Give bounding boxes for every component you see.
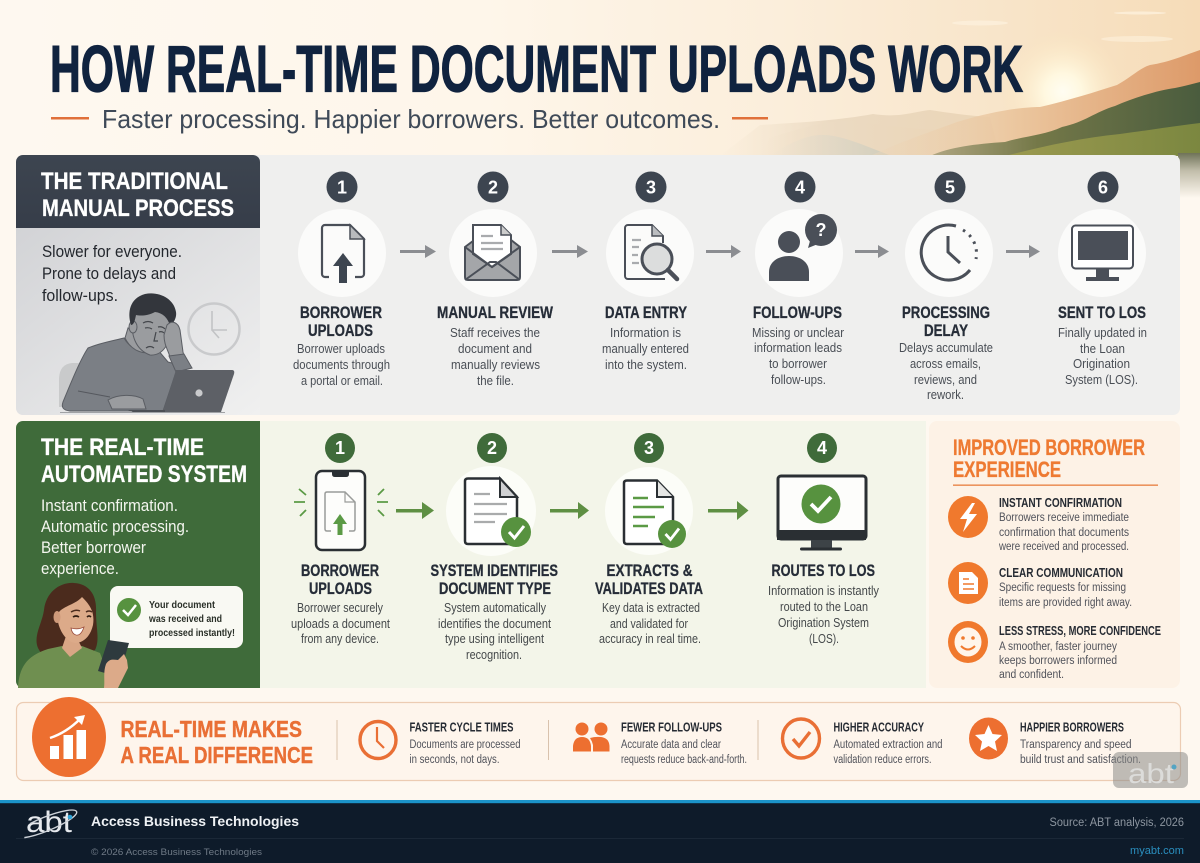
heading: real-time makes a real difference: REAL-TIME MAKES (120, 716, 302, 742)
step 3 text: DATA ENTRY (605, 304, 687, 322)
step 2 text: type using intelligent (445, 632, 544, 646)
callout: confirmation message: processed instantly! (149, 627, 235, 639)
panel: improved borrower experience: EXPERIENCE (953, 457, 1061, 482)
step 1 text: Borrower uploads (297, 342, 385, 356)
step 4 text: routed to the Loan (780, 600, 868, 614)
step 3 text (595, 562, 703, 646)
step 2 text: manually reviews (451, 358, 540, 372)
stat: faster cycle times: in seconds, not days. (410, 754, 500, 766)
step 3 text: into the system. (605, 358, 687, 372)
panel: real-time makes a real difference (16, 697, 1180, 780)
step 5 text (899, 304, 993, 402)
benefit: less stress, more confidence: A smoother, faster journey (999, 641, 1117, 653)
step 1 text: documents through (293, 358, 390, 372)
benefit: clear communication: CLEAR COMMUNICATION (999, 565, 1123, 580)
step 2 text: System automatically (444, 601, 547, 615)
step 3: extracts and validates data: 3 (644, 438, 654, 458)
stat: fewer follow-ups (573, 720, 747, 766)
step 2 text: the file. (477, 374, 514, 388)
step 3 text: EXTRACTS & (606, 562, 693, 580)
stat: faster cycle times (360, 720, 520, 766)
illustration: stressed man at laptop (59, 293, 240, 413)
stat: higher accuracy: HIGHER ACCURACY (834, 720, 924, 734)
step 3: extracts and validates data (595, 433, 703, 646)
benefit: less stress, more confidence: and confident. (999, 669, 1064, 681)
stat: higher accuracy (782, 719, 942, 766)
step 1 text: uploads a document (291, 617, 390, 631)
step 4 text: follow-ups. (771, 373, 826, 387)
benefit: instant confirmation: INSTANT CONFIRMATION (999, 495, 1122, 510)
step 1 text: UPLOADS (309, 580, 372, 598)
callout: confirmation message (110, 586, 243, 648)
benefit: instant confirmation: Borrowers receive immediate (999, 512, 1129, 524)
step 2 text: DOCUMENT TYPE (439, 580, 551, 598)
arrow 3 to 4 (708, 501, 748, 520)
panel: improved borrower experience (929, 421, 1180, 688)
panel: left automated summary: Better borrower (41, 538, 146, 557)
step 4: follow-ups: ? (816, 220, 826, 240)
step 1 text (293, 304, 390, 388)
step 1: borrower uploads (291, 433, 390, 646)
step 1 text: BORROWER (300, 304, 382, 322)
step 6: sent to LOS: 6 (1098, 178, 1108, 198)
step 2 text (430, 562, 558, 662)
step 3 text: accuracy in real time. (599, 632, 701, 646)
step 3: data entry (602, 172, 694, 372)
step 5 text: PROCESSING (902, 304, 990, 322)
step 2 text: SYSTEM IDENTIFIES (430, 562, 558, 580)
header landscape (0, 0, 1200, 198)
panel: left traditional summary (16, 155, 260, 415)
arrow 2 to 3 (550, 502, 589, 519)
step 5 text: rework. (927, 388, 964, 402)
step 3 text: Key data is extracted (602, 601, 700, 615)
benefit: clear communication: items are provided right away. (999, 597, 1132, 609)
step 1 text: Borrower securely (297, 601, 384, 615)
panel: left traditional summary: MANUAL PROCESS (42, 195, 234, 222)
step 2 text: recognition. (466, 648, 522, 662)
step 2: system identifies document type (430, 433, 558, 662)
step 4: follow-ups: 4 (795, 178, 805, 198)
arrow 3 to 4 (706, 245, 741, 258)
stat: faster cycle times: FASTER CYCLE TIMES (410, 720, 514, 734)
step 2: system identifies document type: 2 (487, 438, 497, 458)
step 5 text: reviews, and (914, 373, 977, 387)
step 4: routes to LOS (768, 433, 880, 646)
step 4 text: Information is instantly (768, 584, 880, 598)
step 3 text: manually entered (602, 342, 689, 356)
step 6 text: Finally updated in (1058, 326, 1147, 340)
stat: happier borrowers: build trust and satisfaction. (1020, 754, 1141, 766)
stat: higher accuracy: validation reduce errors. (834, 754, 932, 766)
step 4 text (768, 562, 880, 646)
step 5 text: Delays accumulate (899, 341, 993, 355)
step 4 text: to borrower (769, 357, 827, 371)
footer source: Source: ABT analysis, 2026 (1050, 817, 1184, 829)
stat: happier borrowers: Transparency and speed (1020, 739, 1132, 751)
panel: left traditional summary: Prone to delays and (42, 264, 176, 283)
step 2 text (437, 304, 553, 388)
logo: abt: abt (26, 806, 73, 839)
step 2: manual review (437, 172, 553, 388)
step 6 text: Origination (1073, 357, 1130, 371)
icon: growth chart (32, 697, 106, 777)
illustration: smiling woman with phone (18, 583, 129, 688)
footer (0, 800, 1200, 863)
step 1 text: UPLOADS (308, 322, 373, 340)
step 2 text: MANUAL REVIEW (437, 304, 553, 322)
step 4 text: ROUTES TO LOS (772, 562, 875, 580)
panel: left traditional summary: THE TRADITIONAL (41, 168, 228, 195)
panel: traditional manual process (16, 155, 1180, 415)
benefit: instant confirmation: confirmation that documents (999, 527, 1129, 539)
panel: real-time automated system (16, 421, 926, 688)
stat: fewer follow-ups: FEWER FOLLOW-UPS (621, 720, 722, 734)
panel: left automated summary: AUTOMATED SYSTEM (41, 461, 247, 488)
benefit: less stress, more confidence: keeps borrowers informed (999, 655, 1117, 667)
step 4 text: information leads (754, 341, 842, 355)
arrow 2 to 3 (552, 245, 588, 258)
step 6 text: SENT TO LOS (1058, 304, 1146, 322)
stat: higher accuracy: Automated extraction and (834, 739, 942, 751)
step 6: sent to LOS (1058, 172, 1147, 387)
benefit: less stress, more confidence (948, 621, 1161, 681)
callout: confirmation message: was received and (148, 613, 222, 625)
benefit: instant confirmation: were received and processed. (998, 541, 1129, 553)
step 1 text: BORROWER (301, 562, 379, 580)
step 4 text: FOLLOW-UPS (753, 304, 842, 322)
step 5 text: across emails, (910, 357, 981, 371)
logo: abt (13, 805, 79, 843)
step 5 text: DELAY (924, 322, 968, 340)
step 2 text: Staff receives the (450, 326, 540, 340)
step 4: routes to LOS: 4 (817, 438, 827, 458)
subtitle: Faster processing. Happier borrowers. Better outcomes. (102, 104, 720, 134)
stat: fewer follow-ups: Accurate data and clear (621, 739, 721, 751)
step 6 text (1058, 304, 1147, 387)
step 4: follow-ups (752, 172, 844, 387)
step 2 text: document and (458, 342, 532, 356)
stat: happier borrowers: HAPPIER BORROWERS (1020, 720, 1124, 734)
panel: left automated summary (16, 421, 260, 688)
stat: happier borrowers (969, 718, 1141, 766)
arrow 1 to 2 (400, 245, 436, 258)
step 1 text: a portal or email. (301, 374, 383, 388)
benefit: instant confirmation (948, 495, 1129, 553)
arrow 4 to 5 (855, 245, 889, 258)
stat: faster cycle times: Documents are processed (410, 739, 520, 751)
benefit: clear communication: Specific requests for missing (999, 582, 1126, 594)
panel: left automated summary: Automatic processing. (41, 517, 189, 536)
footer company name: Access Business Technologies (91, 814, 299, 829)
heading: real-time makes a real difference (120, 716, 313, 768)
callout: confirmation message: Your document (149, 599, 215, 611)
step 1: borrower uploads: 1 (337, 178, 347, 198)
step 3: data entry: 3 (646, 178, 656, 198)
step 1 text (291, 562, 390, 646)
panel: left automated summary: THE REAL-TIME (41, 434, 204, 461)
step 1: borrower uploads (293, 172, 390, 388)
benefit: clear communication (948, 562, 1132, 609)
footer url: myabt.com (1130, 845, 1184, 857)
step 2 text: identifies the document (438, 617, 551, 631)
stat: fewer follow-ups: requests reduce back-and-forth. (621, 754, 747, 766)
panel: left automated summary: experience. (41, 559, 119, 578)
step 3 text: VALIDATES DATA (595, 580, 703, 598)
step 4 text (752, 304, 844, 387)
step 3 text: Information is (610, 326, 681, 340)
panel: left traditional summary: Slower for everyone. (42, 242, 182, 261)
step 1 text: from any device. (301, 632, 379, 646)
watermark logo: abt (1128, 758, 1174, 789)
heading: real-time makes a real difference: A REAL DIFFERENCE (120, 742, 313, 768)
step 5: processing delay (899, 172, 993, 402)
step 3 text: and validated for (610, 617, 688, 631)
step 6 text: the Loan (1080, 342, 1125, 356)
step 4 text: Missing or unclear (752, 326, 844, 340)
watermark logo (1113, 752, 1188, 789)
footer copyright: © 2026 Access Business Technologies (91, 847, 262, 858)
step 2: manual review: 2 (488, 178, 498, 198)
step 5: processing delay: 5 (945, 178, 955, 198)
step 3 text (602, 304, 689, 372)
step 4 text: Origination System (778, 616, 869, 630)
step 1: borrower uploads: 1 (335, 438, 345, 458)
step 4 text: (LOS). (809, 632, 839, 646)
step 6 text: System (LOS). (1065, 373, 1138, 387)
panel: left automated summary: Instant confirmation. (41, 496, 178, 515)
arrow 1 to 2 (396, 502, 434, 519)
panel: left traditional summary: follow-ups. (42, 286, 118, 305)
arrow 5 to 6 (1006, 245, 1040, 258)
